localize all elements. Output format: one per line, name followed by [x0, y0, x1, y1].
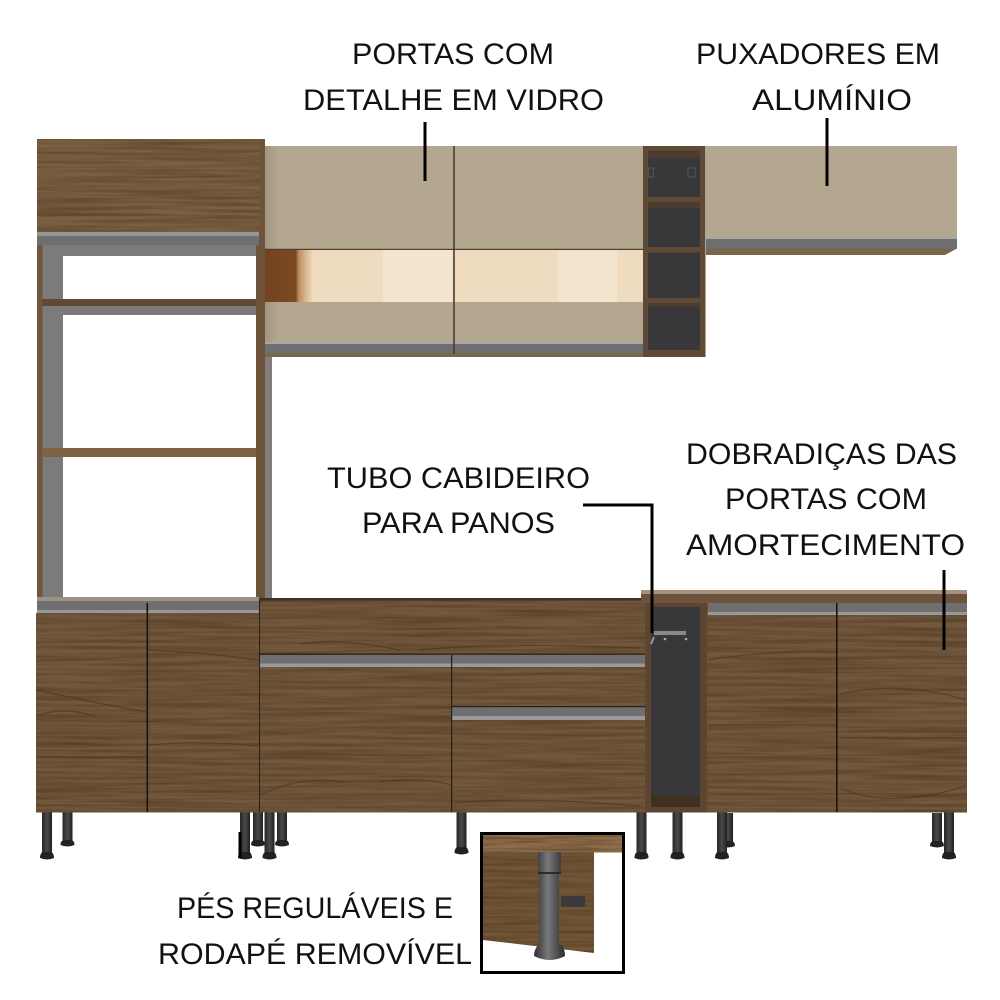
detail inset: adjustable foot — [482, 834, 624, 972]
label: pes regulaveis: PÉS REGULÁVEIS E — [177, 892, 453, 925]
open niche with towel rail — [645, 596, 707, 812]
separator lines — [259, 600, 645, 812]
cooktop edge line — [259, 598, 645, 600]
countertop right — [641, 590, 967, 603]
inset foot — [534, 852, 585, 960]
niche shelf shadows — [648, 151, 700, 307]
legs — [40, 807, 956, 860]
label: puxadores em aluminio — [696, 38, 940, 117]
niche dark compartments — [648, 151, 700, 350]
tall open cabinet, left — [37, 139, 265, 601]
door split — [836, 603, 838, 812]
label: dobradicas: PORTAS COM — [725, 483, 927, 516]
center handle lower — [452, 707, 645, 720]
label: tubo cabideiro para panos — [327, 462, 590, 540]
callout line: towel rail — [583, 505, 652, 633]
lower beige fronts — [265, 302, 643, 342]
aluminium handle — [265, 342, 643, 353]
label: portas com detalhe em vidro: DETALHE EM VIDRO — [303, 84, 604, 117]
label: tubo cabideiro para panos: PARA PANOS — [362, 507, 555, 540]
wood side panels and shelves — [37, 139, 265, 601]
label: pes regulaveis: RODAPÉ REMOVÍVEL — [158, 938, 472, 971]
label: dobradicas: AMORTECIMENTO — [686, 529, 965, 562]
gray back panels — [42, 245, 256, 600]
right cabinet handle — [706, 237, 957, 248]
right cabinet wood edge — [706, 248, 957, 255]
streaks — [260, 642, 640, 806]
callout line: glass doors — [424, 122, 426, 181]
callout line: hinges — [942, 570, 946, 650]
callout line: aluminium handles — [826, 118, 828, 186]
center handle upper — [260, 655, 645, 667]
inset lower plinth — [483, 852, 594, 953]
cabinet wood bottom edge — [265, 353, 643, 357]
base left handles — [37, 597, 259, 613]
inset top board — [483, 835, 622, 852]
label: dobradicas — [686, 438, 965, 562]
door streak marks — [708, 652, 966, 799]
door split — [146, 603, 148, 812]
towel rail — [651, 631, 687, 644]
upper glass-door cabinet — [265, 146, 643, 357]
niche floor — [651, 795, 700, 807]
label: portas com detalhe em vidro: PORTAS COM — [352, 38, 554, 71]
center base unit — [259, 598, 645, 812]
door streak marks — [37, 650, 258, 757]
base left double-door unit — [36, 597, 259, 812]
top door handle — [37, 232, 259, 245]
gray back strip right of tall cabinet — [265, 357, 272, 600]
label: puxadores em aluminio: ALUMÍNIO — [752, 84, 912, 117]
callout line: feet — [238, 832, 242, 858]
niche hanging brackets — [648, 168, 695, 177]
label: portas com detalhe em vidro — [303, 38, 604, 117]
niche with shelves — [643, 146, 706, 357]
door split lines — [265, 146, 643, 354]
label: pes regulaveis — [158, 892, 472, 971]
upper right beige cabinet — [706, 146, 957, 255]
glass strip — [265, 250, 643, 302]
handles — [708, 603, 967, 615]
top wood door — [37, 139, 260, 232]
label: dobradicas: DOBRADIÇAS DAS — [686, 438, 957, 471]
right base double-door unit — [707, 603, 967, 812]
upper beige fronts — [265, 146, 643, 250]
label: puxadores em aluminio: PUXADORES EM — [696, 38, 940, 71]
label: tubo cabideiro para panos: TUBO CABIDEIRO — [327, 462, 590, 495]
